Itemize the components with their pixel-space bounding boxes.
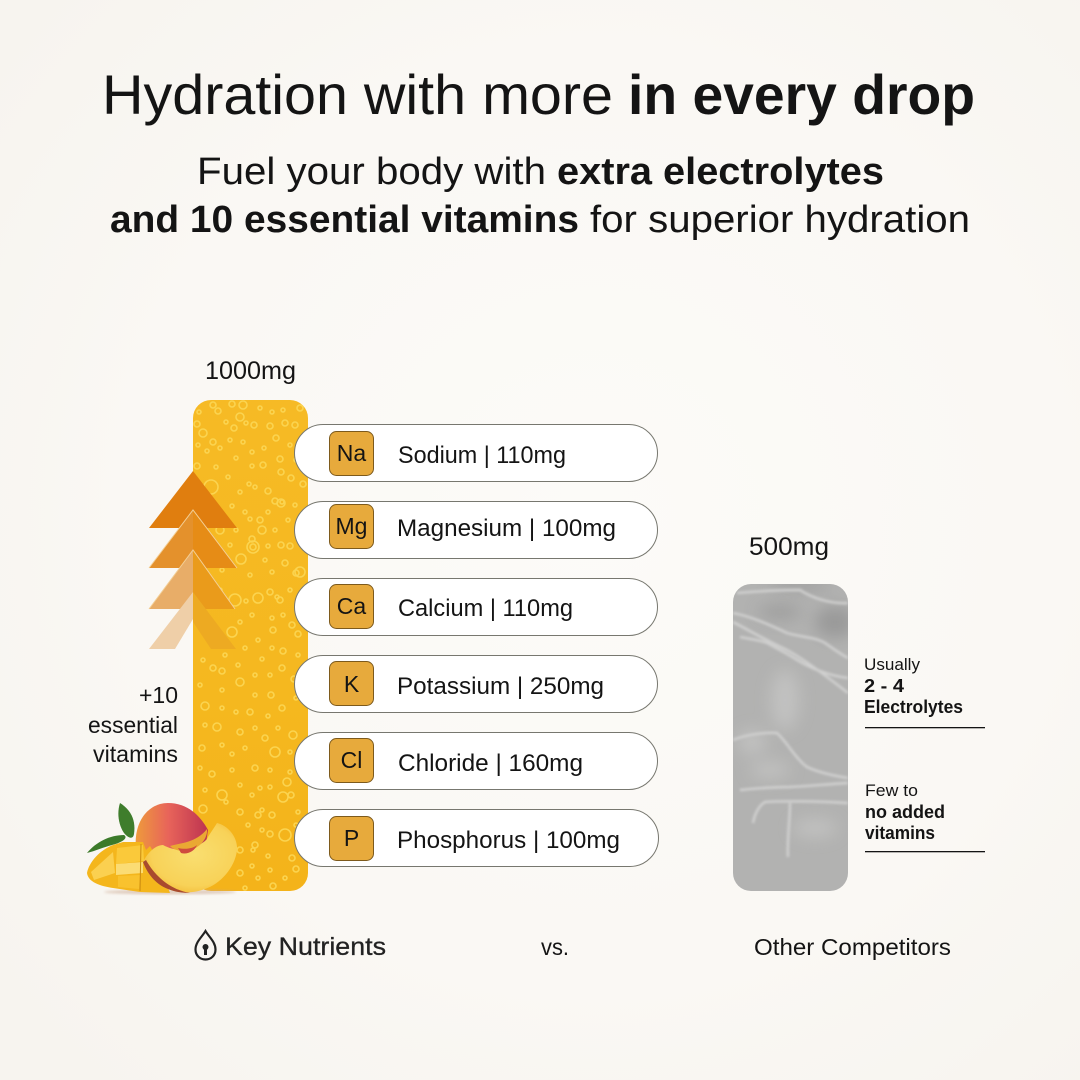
- subtitle: for superior hydration: [590, 199, 970, 241]
- pill: phosphorus: Phosphorus | 100mg: [397, 827, 620, 854]
- whole mango: [136, 803, 208, 862]
- pill: chloride: Chloride | 160mg: [398, 750, 583, 777]
- pill: potassium: [294, 656, 658, 712]
- arrow 4: [149, 592, 236, 649]
- pill: sodium: Sodium | 110mg: [398, 442, 566, 469]
- bar: other competitors: [733, 579, 855, 891]
- label: +10 essential vitamins: vitamins: [93, 741, 178, 767]
- title: [102, 63, 975, 126]
- logo: Key Nutrients: Key Nutrients: [225, 933, 386, 961]
- title: in every drop: [628, 63, 975, 126]
- subtitle: extra electrolytes: [557, 151, 884, 193]
- label: vs.: vs.: [541, 934, 569, 960]
- note: electrolytes: 2 - 4: [864, 676, 904, 696]
- arrow 1: [149, 471, 237, 528]
- title: Hydration with more: [102, 63, 613, 126]
- label: +10 essential vitamins: essential: [88, 712, 178, 738]
- icon: keyhole drop: [196, 931, 216, 960]
- bar: key nutrients: [193, 400, 308, 891]
- pill: chloride: [294, 732, 658, 790]
- label: +10 essential vitamins: +10: [139, 682, 178, 708]
- arrow 3: [149, 550, 235, 609]
- pill: magnesium: Mg: [336, 513, 367, 539]
- label: +10 essential vitamins: [88, 682, 178, 767]
- note: vitamins: no added: [865, 802, 945, 822]
- peach skin edge: [143, 860, 190, 893]
- label: 500mg: 500mg: [749, 533, 829, 561]
- peach slice: [143, 823, 237, 892]
- note: electrolytes: [864, 655, 985, 728]
- pill: calcium: [294, 578, 658, 636]
- note: vitamins: Few to: [865, 781, 918, 800]
- pill: potassium: K: [344, 671, 360, 697]
- pill: sodium: [294, 424, 658, 482]
- ground shadow: [104, 890, 236, 894]
- arrow 2: [149, 510, 237, 568]
- peach pit cavity: [170, 829, 207, 854]
- subtitle: [110, 151, 970, 241]
- pill: calcium: Ca: [337, 593, 366, 619]
- note: vitamins: vitamins: [865, 823, 935, 843]
- pill: potassium: Potassium | 250mg: [397, 673, 604, 700]
- pill: sodium: Na: [337, 440, 366, 466]
- cubed mango: [87, 842, 170, 893]
- note: electrolytes: Electrolytes: [864, 697, 963, 717]
- leaves: [87, 803, 134, 853]
- illustration: mango and peach: [87, 803, 237, 894]
- pill: chloride: Cl: [341, 747, 362, 773]
- note: electrolytes: Usually: [864, 655, 920, 674]
- subtitle: Fuel your body with: [197, 151, 546, 193]
- pill: calcium: Calcium | 110mg: [398, 595, 573, 622]
- label: Other Competitors: Other Competitors: [754, 934, 951, 960]
- note: vitamins: [865, 781, 985, 852]
- pill: magnesium: [294, 502, 658, 558]
- icon: stacked up arrows: [149, 471, 237, 649]
- pill: phosphorus: [294, 810, 658, 866]
- label: 1000mg: 1000mg: [205, 357, 296, 385]
- subtitle: and 10 essential vitamins: [110, 199, 579, 241]
- ingredient pills: [294, 424, 658, 866]
- pill: magnesium: Magnesium | 100mg: [397, 515, 616, 542]
- pill: phosphorus: P: [344, 825, 359, 851]
